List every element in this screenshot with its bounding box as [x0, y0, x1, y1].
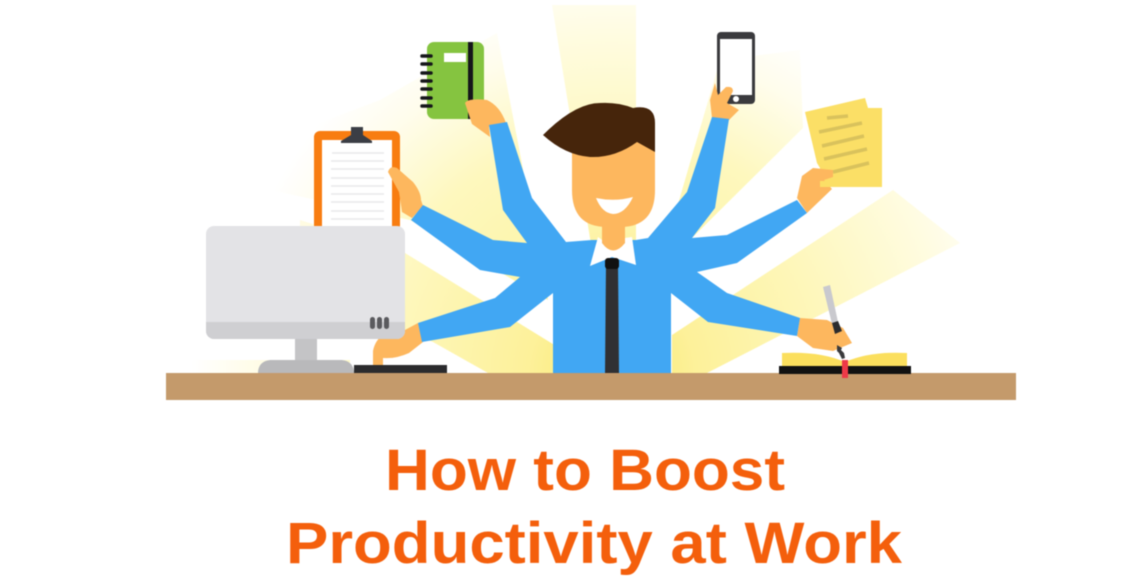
- keyboard: [354, 365, 447, 373]
- neck: [602, 215, 625, 252]
- title line 1: How to Boost: [385, 438, 785, 503]
- clipboard: [314, 127, 400, 231]
- face: [572, 125, 655, 227]
- smile: [596, 197, 633, 214]
- hands: [388, 83, 852, 351]
- smartphone: [717, 32, 755, 104]
- tie knot: [605, 258, 619, 269]
- character: [411, 103, 807, 373]
- hair: [543, 103, 655, 157]
- monitor: [206, 226, 423, 373]
- keyboard hand: [373, 323, 423, 365]
- desk: [166, 373, 1016, 400]
- title line 2: Productivity at Work: [286, 511, 903, 576]
- notebook: [422, 42, 484, 119]
- documents: [805, 98, 882, 187]
- paper edge over hand: [820, 181, 882, 187]
- blue shirt and arms: [411, 117, 807, 373]
- collar: [590, 237, 636, 266]
- tie: [605, 263, 619, 373]
- title: [286, 438, 903, 576]
- pen: [823, 285, 845, 359]
- sun rays background: [192, 5, 960, 373]
- open book: [779, 353, 911, 378]
